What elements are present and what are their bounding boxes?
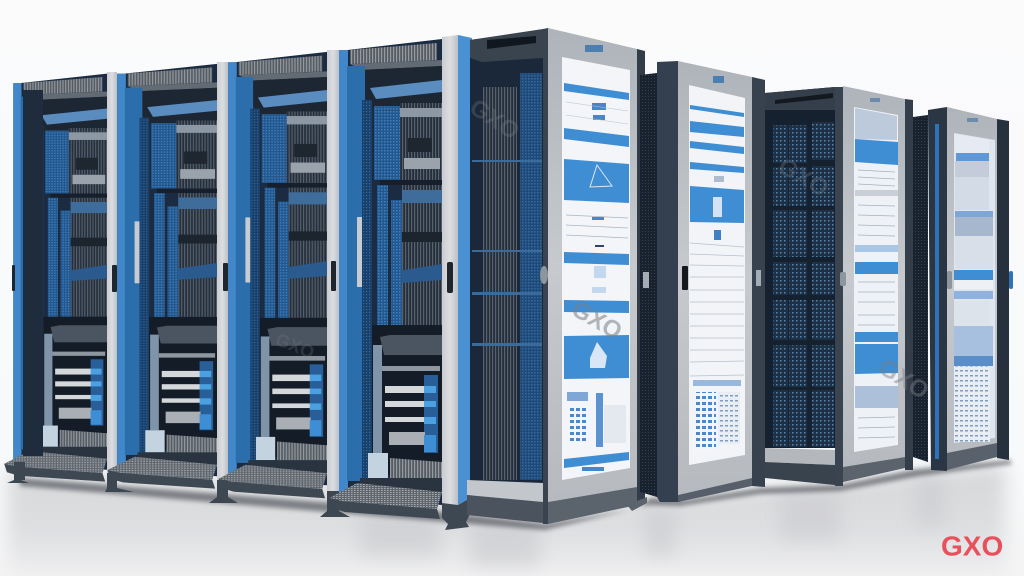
rack 8 door label <box>967 118 978 122</box>
rack 8 back mesh <box>913 115 928 462</box>
rack 5 corner post <box>543 28 548 524</box>
panel icon hands <box>590 342 607 368</box>
panel blue chart <box>693 380 741 386</box>
server rack 5 <box>467 28 647 524</box>
rack 6 latch <box>756 270 761 286</box>
rack 6 handle <box>682 266 688 290</box>
panel table chart <box>567 392 588 401</box>
rack 4 door post <box>442 35 458 505</box>
rack 8 door <box>947 107 997 467</box>
server rack 8 <box>913 107 1013 471</box>
rack 7 info panel <box>854 107 898 452</box>
watermarks: GXO <box>567 295 627 345</box>
rack 5 door handle <box>540 266 548 284</box>
rack 4 blue edge <box>458 35 472 505</box>
rack 8 handle <box>947 271 952 289</box>
panel text blocks <box>592 103 606 110</box>
logo: GXO: GXO <box>941 530 1003 562</box>
watermarks: GXO <box>273 329 317 363</box>
rack 3 foot <box>320 491 350 517</box>
panel icon triangle <box>590 165 612 187</box>
rack 1 left handle <box>12 265 15 291</box>
watermarks: GXO <box>465 94 524 145</box>
watermarks: GXO <box>773 153 833 203</box>
rack 5 door <box>548 28 637 502</box>
panel icon block <box>713 197 722 217</box>
rack 4 handle <box>447 262 453 293</box>
rack 8 info panel <box>954 133 995 443</box>
rack 4 foot <box>442 497 472 530</box>
server rack 4 <box>329 35 472 530</box>
rack 1 handle <box>112 265 117 292</box>
rack 6 door <box>678 61 752 495</box>
rack 1 inner left panel <box>23 90 43 456</box>
rack 7 interior <box>765 87 835 448</box>
rack 5 interior <box>470 30 543 502</box>
rack contact shadows <box>20 460 1012 530</box>
rack 1 foot <box>105 473 134 492</box>
floor reflection <box>8 465 1005 576</box>
rack 5 latch <box>643 272 649 288</box>
rack 7 door <box>843 86 905 467</box>
rack 6 door label <box>713 76 724 83</box>
rack 3 handle <box>331 261 336 291</box>
rack 6 front post <box>657 61 680 502</box>
rack 5 door label <box>585 45 603 52</box>
server rack 1 <box>4 72 134 492</box>
watermarks <box>273 94 934 405</box>
server rack 3 <box>219 50 350 517</box>
server rack 6 <box>640 61 765 502</box>
floor reflection streaks <box>360 475 945 565</box>
rack 5 base <box>467 480 543 502</box>
rack 7 door label <box>870 98 880 102</box>
server rack 2 <box>107 62 238 503</box>
rack 3 door post <box>327 50 339 491</box>
rack 7 base <box>765 448 835 465</box>
rack 7 corner post <box>835 87 843 486</box>
rack 6 info panel <box>689 85 745 465</box>
rack 2 handle <box>223 263 228 291</box>
rack 5 info panel <box>562 57 630 480</box>
rack 8 blue stripe <box>935 124 939 459</box>
rack 1 left foot <box>7 462 29 483</box>
server rack 7 <box>765 86 913 486</box>
rack 5 foot <box>627 497 647 511</box>
rack 7 handle <box>840 272 846 286</box>
rack 1 door post <box>107 72 117 473</box>
watermarks: GXO <box>874 354 934 405</box>
rack 2 foot <box>209 480 238 503</box>
rack 8 blue handle <box>1009 271 1013 289</box>
rack 6 back mesh <box>640 73 657 497</box>
rack 2 door post <box>217 62 228 480</box>
rack 8 front post <box>928 107 947 471</box>
panel rows <box>690 243 744 376</box>
